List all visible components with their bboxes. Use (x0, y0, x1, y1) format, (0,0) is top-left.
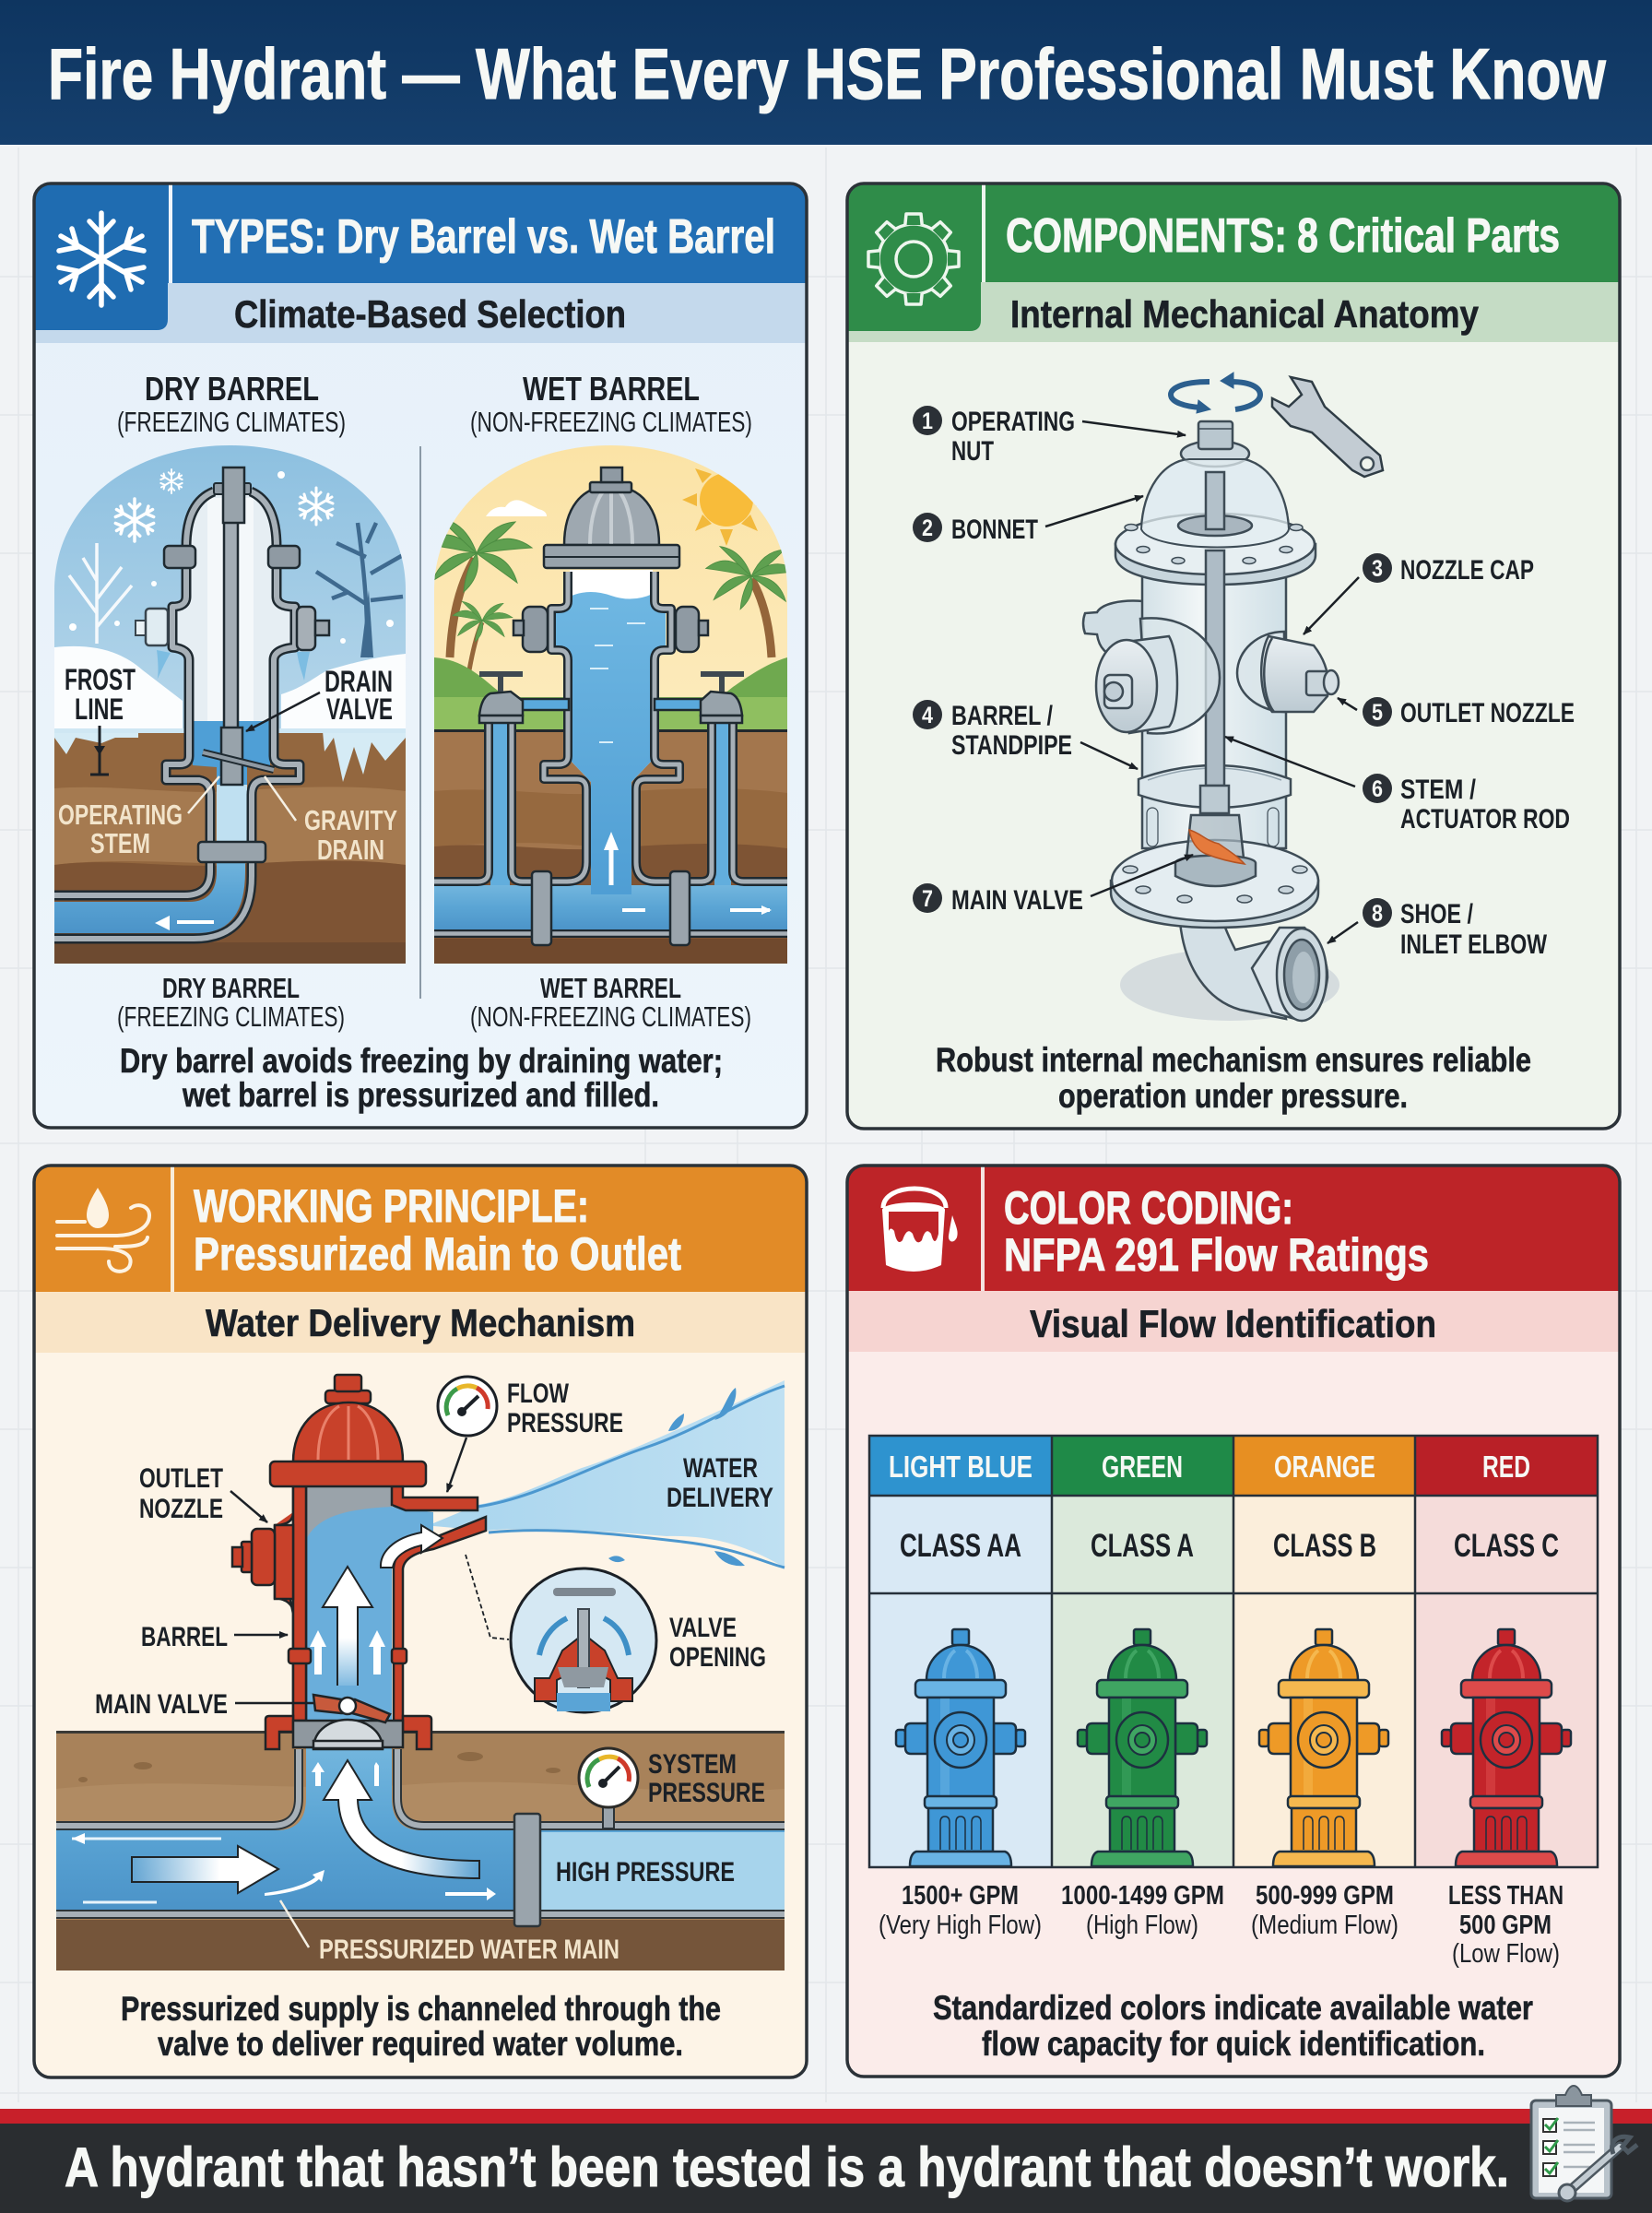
label: outlet nozzle: OUTLET (139, 1463, 223, 1494)
callout 8: shoe inlet elbow (1328, 898, 1548, 960)
panel header: components (847, 183, 1620, 342)
callout 1: operating nut (913, 406, 1186, 467)
callout 1: operating nut: 1 (922, 408, 933, 434)
label: water delivery: WATER (683, 1453, 758, 1484)
shoe elbow (1180, 922, 1328, 1021)
flow: class aa (879, 1881, 1042, 1940)
column: light blue class aa: LIGHT BLUE (889, 1450, 1032, 1484)
back nozzle (1083, 601, 1143, 657)
hydrant casing (232, 1375, 486, 1749)
label: system pressure: PRESSURE (648, 1778, 765, 1808)
barrel (1139, 572, 1291, 848)
title banner (0, 0, 1652, 145)
column: red class c: RED (1482, 1450, 1530, 1484)
column: light blue class aa: CLASS AA (900, 1528, 1021, 1564)
column: orange class b (1233, 1436, 1415, 1867)
caption: types: wet barrel is pressurized and filled. (182, 1076, 659, 1114)
callout 3: nozzle cap: 3 (1372, 556, 1383, 582)
label: frost line: FROST (65, 663, 136, 696)
label: drain valve: VALVE (326, 692, 393, 726)
callout 7: main valve (913, 855, 1193, 916)
label: pressurized water main: PRESSURIZED WATER MAIN (319, 1935, 620, 1965)
icon: wrench (1272, 377, 1383, 477)
caption: components: Robust internal mechanism ensures reliable (936, 1041, 1531, 1079)
label: water delivery: DELIVERY (667, 1483, 773, 1513)
caption: working principle: Pressurized supply is channeled through the (121, 1990, 721, 2028)
callout 2: bonnet: 2 (922, 515, 933, 541)
heading: working principle (194, 1180, 681, 1280)
flow arrows (132, 1525, 479, 1893)
callout 1: operating nut: NUT (951, 436, 994, 467)
callout 1: operating nut: OPERATING (951, 407, 1075, 437)
label: system pressure: SYSTEM (648, 1749, 737, 1780)
label: wet barrel top (470, 370, 752, 438)
label: main valve: MAIN VALVE (95, 1689, 228, 1720)
panel: working principle (34, 1166, 807, 2077)
label: gravity drain: GRAVITY (304, 804, 397, 836)
label: frost line: LINE (75, 692, 124, 726)
caption: working principle (121, 1990, 721, 2063)
caption: types (120, 1042, 723, 1114)
label: high pressure: HIGH PRESSURE (556, 1857, 735, 1888)
label: wet barrel top: WET BARREL (523, 370, 700, 408)
callout 5: outlet nozzle: OUTLET NOZZLE (1400, 698, 1575, 728)
flow: class b: (Medium Flow) (1251, 1911, 1398, 1940)
callout 8: shoe inlet elbow: SHOE / (1400, 899, 1474, 929)
callout 7: main valve: 7 (922, 886, 933, 912)
label: outlet nozzle: NOZZLE (139, 1494, 223, 1524)
inset: valve opening (466, 1555, 656, 1712)
main valve disc (293, 1695, 403, 1749)
callout 7: main valve: MAIN VALVE (951, 885, 1083, 916)
callout 4: barrel standpipe: 4 (922, 703, 933, 728)
label: dry barrel bottom: (FREEZING CLIMATES) (117, 1000, 345, 1033)
flow: class c: (Low Flow) (1452, 1939, 1560, 1969)
subheading: climate: Climate-Based Selection (234, 292, 626, 336)
bonnet dome (1141, 421, 1289, 529)
flow: class aa: 1500+ GPM (902, 1881, 1019, 1911)
subheading: anatomy: Internal Mechanical Anatomy (1010, 292, 1480, 336)
heading: color coding: NFPA 291 Flow Ratings (1004, 1229, 1429, 1281)
label: wet barrel bottom: WET BARREL (540, 972, 681, 1004)
lower flange (1111, 840, 1318, 928)
callout 4: barrel standpipe: STANDPIPE (951, 730, 1072, 761)
panel header: working principle (34, 1166, 807, 1353)
callout 6: stem actuator rod: ACTUATOR ROD (1400, 804, 1570, 834)
flow: class b: 500-999 GPM (1256, 1881, 1394, 1911)
icon: clipboard and wrench (1531, 2086, 1637, 2201)
label: flow pressure (507, 1379, 623, 1438)
column: red class c (1415, 1436, 1598, 1867)
flow: class b (1251, 1881, 1398, 1940)
subheading: flow identification: Visual Flow Identification (1030, 1302, 1436, 1345)
callout 6: stem actuator rod (1225, 737, 1570, 834)
flow: class c: 500 GPM (1459, 1911, 1552, 1940)
label: drain valve (246, 665, 393, 731)
label: gravity drain: DRAIN (317, 834, 384, 866)
panel header: types (34, 183, 807, 343)
column: light blue class aa (869, 1436, 1052, 1867)
main flange (514, 1814, 540, 1926)
diagram: wet barrel scene (423, 445, 798, 964)
caption: color coding: flow capacity for quick identification. (982, 2025, 1485, 2063)
label: operating stem (58, 776, 219, 859)
heading: color coding (1004, 1182, 1429, 1281)
flow: class a: (High Flow) (1086, 1911, 1198, 1940)
diagram: dry barrel scene (54, 445, 406, 964)
flow: class aa: (Very High Flow) (879, 1911, 1042, 1940)
column: green class a (1052, 1436, 1233, 1867)
label: wet barrel top: (NON-FREEZING CLIMATES) (470, 406, 752, 438)
front left nozzle (1096, 618, 1220, 734)
footer banner (0, 2109, 1652, 2213)
heading: color coding: COLOR CODING: (1004, 1182, 1293, 1234)
callout 3: nozzle cap: NOZZLE CAP (1400, 555, 1534, 586)
panel: color coding (847, 1166, 1620, 2077)
flow: class a: 1000-1499 GPM (1061, 1881, 1224, 1911)
caption: working principle: valve to deliver required water volume. (158, 2025, 683, 2063)
column: orange class b: CLASS B (1273, 1528, 1376, 1564)
gauge: system pressure (579, 1748, 638, 1828)
label: flow pressure: FLOW (507, 1379, 570, 1409)
label: dry barrel top (117, 370, 346, 438)
label: dry barrel top: DRY BARREL (145, 370, 319, 408)
label: valve opening: VALVE (669, 1613, 737, 1643)
heading: working principle: WORKING PRINCIPLE: (194, 1180, 589, 1232)
table: flow ratings (869, 1436, 1598, 1867)
icon: snowflake (59, 213, 144, 305)
label: drain valve: DRAIN (324, 665, 393, 698)
caption: types: Dry barrel avoids freezing by draining water; (120, 1042, 723, 1080)
icon: paint bucket (882, 1189, 958, 1272)
callout 6: stem actuator rod: STEM / (1400, 775, 1477, 805)
label: system pressure (648, 1749, 765, 1808)
caption: components: operation under pressure. (1058, 1077, 1408, 1115)
label: water delivery (667, 1453, 773, 1513)
heading: working principle: Pressurized Main to Outlet (194, 1228, 681, 1280)
label: wet barrel bottom (470, 972, 751, 1033)
subheading: water delivery: Water Delivery Mechanism (206, 1301, 635, 1344)
icon: rotation arrows (1171, 373, 1260, 413)
label: dry barrel bottom: DRY BARREL (162, 972, 300, 1004)
label: pressurized water main (280, 1900, 620, 1965)
callout 8: shoe inlet elbow: INLET ELBOW (1400, 929, 1548, 960)
label: barrel: BARREL (141, 1622, 228, 1652)
label: valve opening (669, 1613, 766, 1673)
front right nozzle (1237, 632, 1339, 712)
label: frost line (65, 663, 136, 775)
stem (1186, 472, 1245, 867)
label: outlet nozzle (139, 1463, 267, 1524)
label: operating stem: STEM (90, 827, 150, 859)
panel: types dry vs wet barrel (34, 183, 807, 1128)
gauge: flow pressure (438, 1377, 497, 1492)
icon: water and wind (57, 1191, 149, 1272)
heading: types: TYPES: Dry Barrel vs. Wet Barrel (192, 210, 775, 264)
callout 4: barrel standpipe (913, 700, 1138, 769)
callout 8: shoe inlet elbow: 8 (1372, 901, 1383, 927)
caption: components (936, 1041, 1531, 1115)
panel: components (847, 183, 1620, 1129)
column: green class a: GREEN (1102, 1450, 1183, 1484)
water jet (433, 1380, 785, 1568)
label: dry barrel top: (FREEZING CLIMATES) (117, 406, 346, 438)
callout 3: nozzle cap (1304, 553, 1534, 634)
label: gravity drain (265, 776, 397, 866)
label: wet barrel bottom: (NON-FREEZING CLIMATES) (470, 1000, 751, 1033)
label: valve opening: OPENING (669, 1642, 766, 1673)
callout 6: stem actuator rod: 6 (1372, 776, 1383, 802)
upper flange (1115, 459, 1316, 585)
callout 2: bonnet (913, 496, 1143, 545)
icon: gear (868, 214, 959, 304)
column: orange class b: ORANGE (1274, 1450, 1375, 1484)
column: red class c: CLASS C (1454, 1528, 1559, 1564)
flow: class c (1448, 1881, 1564, 1969)
label: dry barrel bottom (117, 972, 345, 1033)
caption: color coding (933, 1989, 1533, 2063)
main valve (1175, 830, 1256, 886)
label: operating stem: OPERATING (58, 799, 183, 831)
callout 2: bonnet: BONNET (951, 515, 1038, 545)
diagram: hydrant cutaway (1083, 373, 1383, 1021)
callout 4: barrel standpipe: BARREL / (951, 701, 1054, 731)
flow: class a (1061, 1881, 1224, 1940)
panel header: color coding (847, 1166, 1620, 1352)
callout 5: outlet nozzle: 5 (1372, 700, 1383, 726)
column: green class a: CLASS A (1091, 1528, 1194, 1564)
callout 5: outlet nozzle (1338, 697, 1575, 728)
caption: color coding: Standardized colors indicate available water (933, 1989, 1533, 2027)
diagram: water delivery (56, 1375, 785, 1970)
label: flow pressure: PRESSURE (507, 1408, 623, 1438)
flow: class c: LESS THAN (1448, 1881, 1564, 1911)
